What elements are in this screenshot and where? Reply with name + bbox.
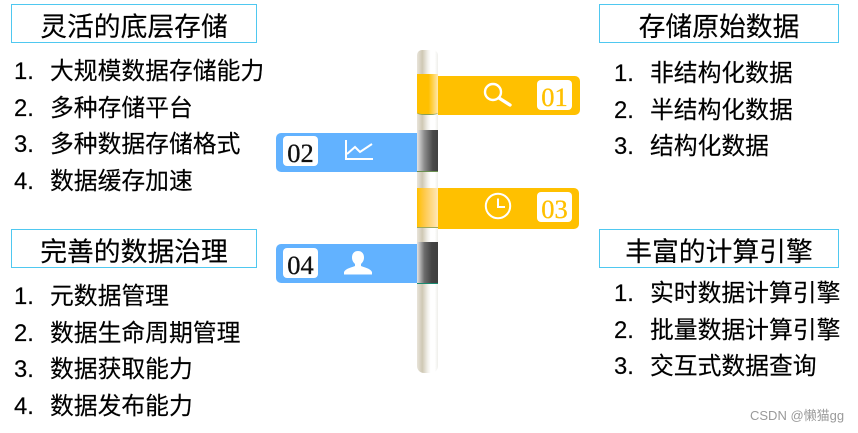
pole band 01: [417, 74, 438, 115]
number 04: 04: [287, 250, 314, 280]
list: raw data types: 结构化数据: [650, 133, 769, 160]
heading: 完善的数据治理: 完善的数据治理: [40, 237, 228, 267]
list: governance features: 2.: [14, 320, 34, 346]
list: raw data types: [614, 60, 793, 160]
icon: user: [344, 251, 372, 274]
icon: magnifier: [484, 82, 512, 107]
list: governance features: 4.: [14, 392, 34, 420]
list: raw data types: 1.: [614, 60, 634, 87]
watermark: CSDN @懒猫gg: [750, 408, 844, 423]
list: compute engines: [614, 280, 840, 380]
list: compute engines: 3.: [614, 353, 634, 380]
number 01: [537, 80, 572, 110]
list: compute engines: 2.: [614, 316, 634, 344]
list: storage features: 多种存储平台: [50, 94, 193, 122]
pole band 02: [417, 130, 438, 172]
list: storage features: 1.: [14, 58, 34, 85]
list: raw data types: 非结构化数据: [650, 60, 793, 87]
heading: 丰富的计算引擎: 丰富的计算引擎: [625, 237, 813, 267]
list: compute engines: 1.: [614, 280, 634, 307]
list: raw data types: 半结构化数据: [650, 96, 793, 124]
list: governance features: 3.: [14, 356, 34, 383]
flag 03: [438, 188, 579, 229]
number 01: 01: [541, 82, 568, 112]
list: raw data types: 3.: [614, 133, 634, 160]
heading: 灵活的底层存储: 灵活的底层存储: [40, 12, 228, 42]
flag 04: [276, 244, 417, 283]
list: storage features: 2.: [14, 94, 34, 122]
heading: 存储原始数据: 存储原始数据: [639, 12, 799, 42]
heading: 存储原始数据: [599, 4, 839, 43]
pole band 04: [417, 242, 438, 284]
number 03: [537, 192, 572, 222]
list: governance features: [14, 283, 240, 420]
icon: line chart: [345, 140, 373, 160]
number 04: [283, 248, 318, 278]
list: governance features: 数据发布能力: [50, 392, 193, 420]
list: governance features: 数据生命周期管理: [50, 320, 240, 346]
list: storage features: 多种数据存储格式: [50, 131, 240, 158]
heading: 完善的数据治理: [11, 229, 257, 268]
list: storage features: 大规模数据存储能力: [50, 58, 264, 85]
list: governance features: 1.: [14, 283, 34, 310]
heading: 丰富的计算引擎: [599, 229, 839, 268]
list: governance features: 数据获取能力: [50, 356, 193, 383]
number 03: 03: [541, 194, 568, 224]
list: compute engines: 交互式数据查询: [650, 353, 817, 380]
flag 01: [438, 76, 580, 115]
list: storage features: [14, 58, 264, 194]
list: compute engines: 实时数据计算引擎: [650, 280, 840, 307]
number 02: [283, 136, 318, 166]
list: storage features: 3.: [14, 131, 34, 158]
list: compute engines: 批量数据计算引擎: [650, 316, 840, 344]
list: storage features: 4.: [14, 168, 34, 194]
list: governance features: 元数据管理: [50, 283, 169, 310]
pole band 03: [417, 188, 438, 228]
icon: clock: [484, 192, 512, 220]
number 02: 02: [287, 138, 314, 168]
heading: 灵活的底层存储: [11, 4, 257, 43]
list: raw data types: 2.: [614, 96, 634, 124]
list: storage features: 数据缓存加速: [50, 168, 193, 194]
flag 02: [276, 133, 417, 172]
central pole: [417, 50, 438, 373]
